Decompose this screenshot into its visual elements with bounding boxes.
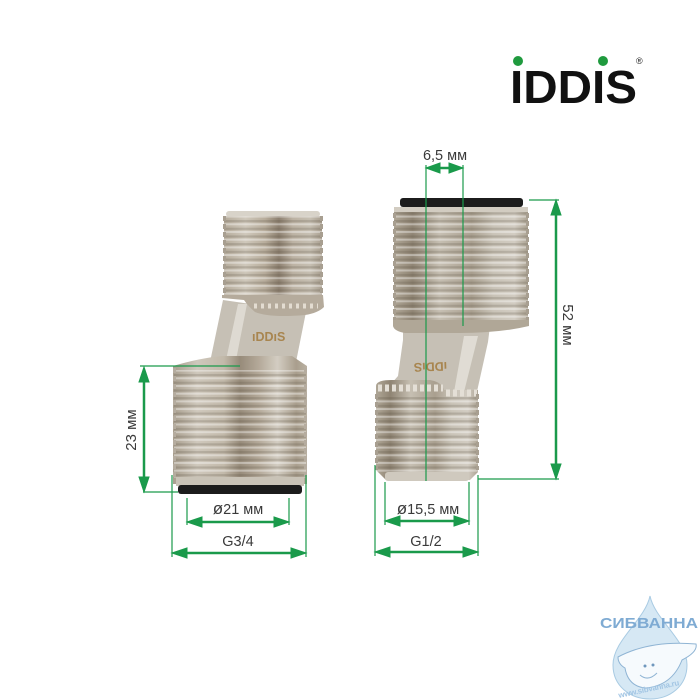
dimension lines: 52 mm extension	[478, 200, 559, 479]
left fitting: neck with logo mark: ıDDıS	[252, 330, 285, 344]
arrow: 23 mm	[139, 367, 149, 492]
right fitting: neck with logo mark	[384, 326, 490, 396]
label: 6,5 mm: 6,5 мм	[423, 148, 467, 164]
left fitting: neck with logo mark	[210, 300, 306, 362]
label: G3/4: G3/4	[222, 534, 254, 550]
left fitting: knurled collar	[222, 295, 324, 316]
brand name: СИБВАННА	[600, 615, 698, 632]
right fitting: neck with logo mark: ıDDıS	[414, 359, 447, 374]
dimension lines: 23 mm extension	[140, 366, 240, 492]
dimensions	[140, 165, 559, 557]
arrow: diameter 21 mm	[187, 517, 289, 527]
label: diameter 15,5 mm: ø15,5 мм	[397, 499, 459, 518]
right fitting: black seal ring	[400, 198, 523, 207]
website: www.sibvanna.ru	[617, 678, 680, 700]
dimension lines: right widths	[375, 465, 478, 556]
label: G1/2: G1/2	[410, 534, 442, 550]
logo: IDDIS: IDDIS	[510, 61, 637, 113]
left fitting: top thread	[224, 211, 322, 296]
label: diameter 21 mm: ø21 мм	[213, 499, 263, 518]
right fitting: lower thread	[376, 380, 478, 481]
arrow: G1/2	[375, 547, 478, 557]
dimension lines: left widths	[172, 475, 306, 557]
left fitting	[173, 211, 324, 494]
watermark: Sibvanna logo	[600, 596, 698, 700]
left fitting: black seal ring	[178, 485, 302, 494]
right fitting	[376, 198, 529, 481]
icon: bathtub	[618, 643, 696, 688]
left fitting: lower thread	[173, 356, 307, 486]
arrow: diameter 15,5 mm	[385, 516, 469, 526]
label: 52 mm: 52 мм	[559, 304, 576, 346]
arrow: G3/4	[172, 548, 306, 558]
dimension lines: 6,5 mm offset	[426, 165, 463, 481]
logo: IDDIS: ®	[636, 56, 643, 66]
arrow: 6,5 mm	[426, 163, 463, 173]
label: 23 mm: 23 мм	[123, 409, 140, 451]
right fitting: upper thread	[393, 207, 529, 333]
arrow: 52 mm	[551, 200, 561, 479]
icon: water drop	[613, 596, 687, 699]
